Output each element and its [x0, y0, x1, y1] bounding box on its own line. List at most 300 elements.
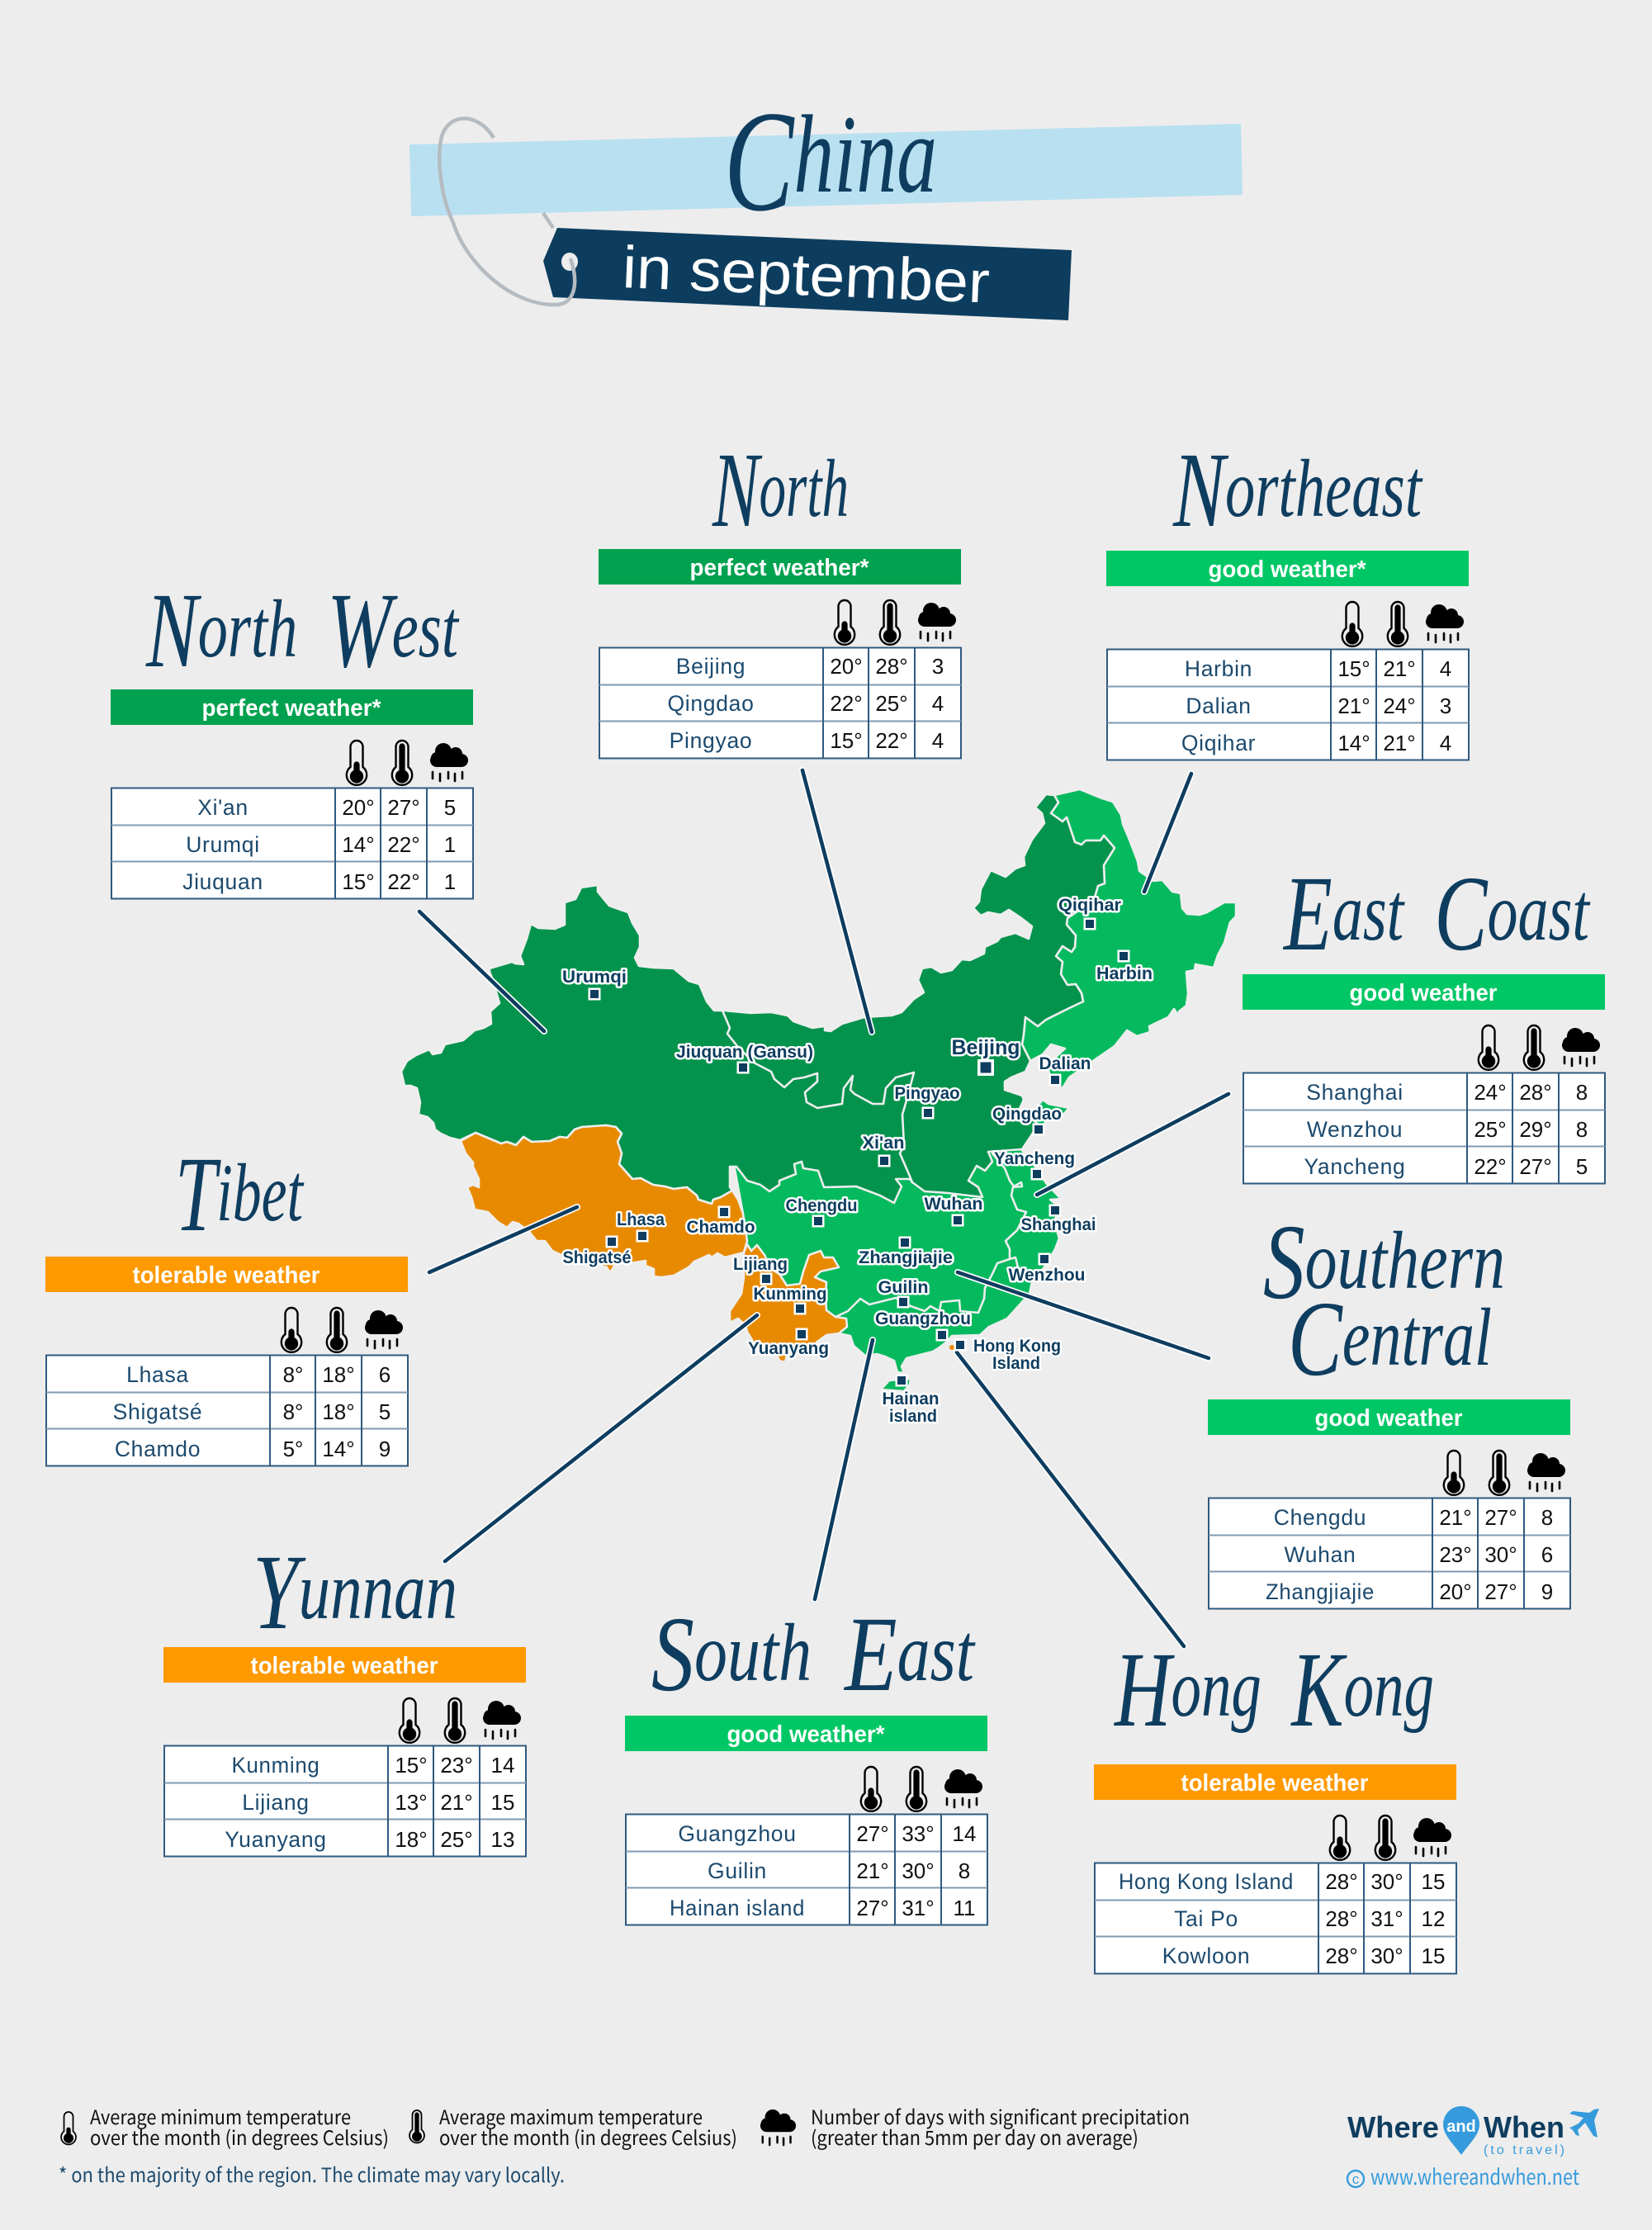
city: Beijing: [951, 1036, 1020, 1076]
city: Urumqi: [562, 968, 627, 1001]
panel body: East Coast: [1243, 974, 1605, 1184]
icon: rainy days: [1413, 1818, 1451, 1856]
climate table: Lijiang: [242, 1790, 310, 1815]
city: Shanghai: [1020, 1204, 1096, 1234]
climate table: [1095, 1863, 1456, 1973]
city: Shigatsé: [563, 1235, 631, 1267]
climate table: [46, 1356, 408, 1466]
climate table: 23°: [440, 1753, 473, 1778]
legend: [59, 2101, 1190, 2188]
climate table: 1: [444, 869, 456, 894]
climate table: 28°: [1325, 1869, 1358, 1894]
climate table: 28°: [1519, 1080, 1552, 1105]
heading: Hong Kong: K: [1290, 1631, 1347, 1749]
city: Yuanyang: [748, 1328, 829, 1358]
leader: Southern Central: [958, 1272, 1209, 1358]
climate table: 14: [953, 1821, 976, 1846]
climate table: 15°: [342, 869, 375, 894]
climate table: Chengdu: [1274, 1505, 1366, 1530]
heading: North West: orth: [198, 583, 327, 675]
climate table: Qiqihar: [1181, 731, 1256, 755]
climate table: Wuhan: [1285, 1542, 1356, 1567]
climate table: 28°: [1325, 1906, 1358, 1931]
city: Shigatsé: Shigatsé: [563, 1248, 631, 1267]
climate table: 14°: [322, 1437, 355, 1461]
climate table: Kunming: [231, 1753, 320, 1778]
legend text: rainy days: [811, 2101, 1190, 2151]
region: Southern Central, South East and East Coast: [732, 1149, 1061, 1373]
city: Chengdu: Chengdu: [786, 1196, 857, 1215]
icon: minimum temperature: [1330, 1816, 1350, 1860]
climate table: 4: [1440, 656, 1451, 681]
climate table: 21°: [856, 1858, 889, 1883]
city: Lijiang: [733, 1255, 788, 1285]
panel body: South East: [625, 1716, 987, 1925]
legend text: maximum temperature: [439, 2101, 737, 2151]
heading: Southern Central: [1263, 1203, 1505, 1399]
legend text: maximum temperature: over the month (in degrees Celsius): [439, 2122, 737, 2151]
city: Xi'an: Xi'an: [862, 1134, 905, 1153]
icon: maximum temperature: [880, 600, 900, 645]
weather banner: [1106, 551, 1469, 586]
icon: rainy days: [1562, 1028, 1600, 1066]
icon: minimum temperature: [347, 741, 367, 785]
city: Hong Kong Island: Hong Kong: [973, 1337, 1061, 1356]
region: Northeast: [1022, 789, 1236, 1088]
heading: Southern Central: entral: [1342, 1291, 1492, 1383]
climate table: Chamdo: [115, 1437, 201, 1461]
climate table: 6: [379, 1362, 391, 1387]
leader: Northeast: [1144, 774, 1191, 892]
climate table: 21°: [1337, 694, 1370, 718]
climate table: 9: [379, 1437, 391, 1461]
weather banner: perfect weather*: [201, 695, 381, 722]
region: Hong Kong: [949, 1345, 954, 1350]
climate table: 27°: [856, 1821, 889, 1846]
leader: Tibet: [429, 1207, 577, 1272]
weather banner: good weather: [1349, 980, 1498, 1006]
climate table: 30°: [1370, 1869, 1403, 1894]
climate table: 27°: [1519, 1154, 1552, 1179]
icon: maximum temperature: [327, 1308, 347, 1352]
icon: minimum temperature: [835, 600, 854, 645]
panel: Tibet: [45, 1135, 408, 1466]
climate table: 18°: [322, 1399, 355, 1424]
climate table: Hong Kong Island: [1119, 1869, 1294, 1894]
leader: Yunnan: [445, 1315, 757, 1561]
city: Hainan island: Hainan: [882, 1390, 940, 1409]
city: Yuanyang: Yuanyang: [748, 1339, 829, 1358]
panel body: Northeast: [1106, 551, 1469, 760]
panel: North: [599, 431, 961, 758]
climate table: Harbin: [1185, 656, 1252, 681]
climate table: [626, 1815, 987, 1925]
climate table: 15: [1422, 1869, 1445, 1894]
climate table: 20°: [342, 795, 375, 820]
climate table: 5: [1576, 1154, 1588, 1179]
heading: Hong Kong: ong: [1344, 1642, 1434, 1734]
city: Hong Kong Island: Island: [992, 1354, 1040, 1373]
panel: North West: [111, 571, 473, 898]
title band: [409, 124, 1243, 216]
climate table: Wenzhou: [1307, 1117, 1403, 1142]
weather banner: [599, 549, 961, 585]
climate table: 5: [444, 795, 456, 820]
climate table: 14°: [342, 832, 375, 857]
heading: East Coast: ast: [1332, 866, 1434, 958]
logo pin word: and: and: [1446, 2118, 1476, 2136]
city: Wuhan: Wuhan: [925, 1195, 982, 1214]
icon: maximum temperature: [445, 1698, 465, 1743]
city: Harbin: Harbin: [1096, 964, 1153, 983]
heading: South East: ast: [897, 1607, 976, 1698]
icon: rainy days: [918, 603, 956, 641]
climate table: 28°: [1325, 1944, 1358, 1968]
weather banner: good weather*: [1209, 556, 1366, 583]
city: Qiqihar: [1058, 896, 1121, 930]
climate table: 31°: [902, 1896, 935, 1920]
city: Kunming: [753, 1285, 827, 1314]
city: Urumqi: Urumqi: [562, 968, 627, 987]
city: Yancheng: Yancheng: [994, 1149, 1075, 1168]
climate table: 24°: [1383, 694, 1416, 718]
icon: maximum temperature: [1375, 1816, 1395, 1860]
legend text: rainy days: Number of days with significant precipitation: [811, 2101, 1190, 2130]
heading: Hong Kong: ong: [1171, 1642, 1291, 1734]
climate table: 28°: [875, 654, 908, 679]
heading: South East: outh: [694, 1607, 845, 1698]
tag string: [439, 118, 575, 305]
weather banner: tolerable weather: [132, 1262, 320, 1289]
climate table: 5: [379, 1399, 391, 1424]
legend text: minimum temperature: [90, 2101, 389, 2151]
heading: North West: est: [392, 583, 460, 675]
legend text: minimum temperature: over the month (in degrees Celsius): [90, 2122, 389, 2151]
climate table: Xi'an: [197, 795, 249, 820]
icon: minimum temperature: [1479, 1025, 1498, 1070]
heading: South East: S: [651, 1595, 694, 1714]
climate table: 30°: [1484, 1542, 1517, 1567]
panel body: Southern Central: [1208, 1399, 1570, 1608]
heading: East Coast: E: [1283, 855, 1332, 973]
city: Guilin: [878, 1278, 928, 1308]
leader: East Coast: [1037, 1094, 1228, 1195]
city: Kunming: Kunming: [753, 1285, 827, 1304]
climate table: Yancheng: [1304, 1154, 1405, 1179]
city: Wenzhou: Wenzhou: [1009, 1266, 1085, 1285]
climate table: Beijing: [676, 654, 746, 679]
city: Beijing: Beijing: [951, 1036, 1020, 1059]
climate table: 15: [1422, 1944, 1445, 1968]
climate table: 3: [932, 654, 944, 679]
leader lines: [419, 770, 1228, 1646]
climate table: 4: [1440, 731, 1451, 755]
climate table: 5°: [283, 1437, 303, 1461]
panel body: North: [599, 549, 961, 758]
panel: South East: [625, 1595, 987, 1925]
heading: Yunnan: unnan: [299, 1545, 457, 1636]
legend icon: maximum temperature: [409, 2110, 424, 2142]
climate table: [164, 1745, 526, 1856]
city: Chengdu: [786, 1196, 857, 1227]
city markers and labels: [562, 896, 1153, 1426]
panel body: Hong Kong: [1094, 1764, 1456, 1973]
climate table: 31°: [1370, 1906, 1403, 1931]
city: Qingdao: Qingdao: [992, 1105, 1062, 1124]
city: Lhasa: Lhasa: [617, 1210, 665, 1229]
climate table: [1243, 1073, 1605, 1184]
weather banner: [111, 689, 473, 725]
region: Hainan island: [881, 1379, 911, 1391]
city: Harbin: [1096, 949, 1153, 983]
heading: Tibet: T: [175, 1135, 221, 1254]
climate table: 15: [491, 1790, 514, 1815]
climate table: 8: [1576, 1117, 1588, 1142]
climate table: Kowloon: [1162, 1944, 1250, 1968]
climate table: 1: [444, 832, 456, 857]
climate table: 30°: [1370, 1944, 1403, 1968]
climate table: 22°: [387, 869, 420, 894]
legend icon: minimum temperature: [61, 2112, 76, 2144]
climate table: 25°: [875, 691, 908, 716]
climate table: Jiuquan: [182, 869, 263, 894]
logo tagline: (to travel): [1484, 2143, 1564, 2157]
province borders: [722, 1011, 1026, 1317]
city: Hainan island: [882, 1374, 940, 1426]
heading: North: orth: [759, 443, 849, 534]
panel: Hong Kong: [1094, 1631, 1456, 1973]
logo wordmark: Where: Where: [1347, 2110, 1439, 2144]
climate table: 8: [1576, 1080, 1588, 1105]
icon: minimum temperature: [1444, 1451, 1464, 1495]
climate table: [599, 647, 961, 758]
climate table: Tai Po: [1174, 1906, 1238, 1931]
weather banner: tolerable weather: [251, 1653, 438, 1679]
city: Dalian: [1039, 1054, 1091, 1087]
city: Jiuquan: [676, 1043, 813, 1073]
climate table: Zhangjiajie: [1266, 1579, 1375, 1604]
heading: Southern Central: outhern: [1305, 1214, 1505, 1306]
climate table: Dalian: [1186, 694, 1252, 718]
climate table: 30°: [902, 1858, 935, 1883]
heading: Northeast: N: [1172, 431, 1229, 550]
weather banner: good weather: [1314, 1405, 1463, 1432]
city: Xi'an: [862, 1134, 905, 1167]
weather banner: [45, 1257, 408, 1292]
icon: minimum temperature: [861, 1767, 881, 1811]
icon: maximum temperature: [1388, 602, 1408, 646]
climate table: 8: [959, 1858, 970, 1883]
climate table: 8: [1541, 1505, 1553, 1530]
icon: rainy days: [1527, 1453, 1565, 1491]
climate table: 29°: [1519, 1117, 1552, 1142]
heading: East Coast: oast: [1488, 866, 1591, 958]
climate table: 27°: [1484, 1579, 1517, 1604]
panel: Northeast: [1106, 431, 1469, 760]
climate table: 27°: [1484, 1505, 1517, 1530]
panel body: North West: [111, 689, 473, 898]
legend text: maximum temperature: Average maximum temperature: [439, 2101, 703, 2130]
climate table: Urumqi: [186, 832, 260, 857]
icon: rainy days: [1426, 604, 1464, 642]
city: Chamdo: [687, 1205, 755, 1237]
icon: rainy days: [483, 1701, 521, 1739]
climate table: 20°: [1439, 1579, 1472, 1604]
website: www.whereandwhen.net: [1370, 2161, 1579, 2191]
panel: Southern Central: [1208, 1203, 1570, 1608]
city: Lijiang: Lijiang: [733, 1255, 788, 1274]
city: Qiqihar: Qiqihar: [1058, 896, 1121, 915]
leader: North: [802, 770, 872, 1032]
heading: South East: E: [844, 1595, 897, 1714]
city: Guangzhou: [875, 1309, 971, 1341]
weather banner: [1094, 1764, 1456, 1800]
climate table: Pingyao: [670, 728, 752, 753]
city: Dalian: Dalian: [1039, 1054, 1091, 1073]
climate table: 14: [491, 1753, 514, 1778]
climate table: Yuanyang: [225, 1827, 327, 1852]
heading: Northeast: ortheast: [1225, 443, 1423, 534]
weather banner: [1208, 1399, 1570, 1435]
weather banner: [1243, 974, 1605, 1010]
panel body: Yunnan: [163, 1647, 526, 1856]
city: Pingyao: [895, 1084, 959, 1120]
climate table: 12: [1422, 1906, 1445, 1931]
logo: Where and When: [1347, 2106, 1599, 2191]
region: Qingdao peninsula: [1032, 1100, 1069, 1133]
icon: maximum temperature: [1524, 1025, 1544, 1070]
region: Tibet: [461, 1125, 747, 1277]
climate table: 8°: [283, 1362, 303, 1387]
heading: North West: W: [327, 571, 398, 690]
region: Yunnan: [730, 1244, 847, 1362]
climate table: [1107, 649, 1469, 760]
climate table: Guangzhou: [678, 1821, 797, 1846]
climate table: 22°: [875, 728, 908, 753]
climate table: 3: [1440, 694, 1451, 718]
weather banner: good weather*: [727, 1721, 885, 1748]
logo pin: [1443, 2106, 1479, 2155]
city: Hainan island: island: [889, 1407, 937, 1426]
climate table: 33°: [902, 1821, 935, 1846]
map of China: [401, 789, 1236, 1391]
climate table: 18°: [322, 1362, 355, 1387]
climate table: 15°: [1337, 656, 1370, 681]
climate table: 18°: [395, 1827, 428, 1852]
legend text: minimum temperature: Average minimum temperature: [90, 2101, 351, 2130]
climate table: Shanghai: [1306, 1080, 1403, 1105]
climate table: Shigatsé: [113, 1399, 202, 1424]
city: Jiuquan: Jiuquan (Gansu): [676, 1043, 813, 1062]
climate table: 23°: [1439, 1542, 1472, 1567]
climate table: 13: [491, 1827, 514, 1852]
city: Shanghai: Shanghai: [1020, 1215, 1096, 1234]
climate table: 21°: [1383, 656, 1416, 681]
icon: rainy days: [430, 743, 468, 781]
panel: East Coast: [1243, 855, 1605, 1184]
footnote: * on the majority of the region. The climate may vary locally.: [59, 2159, 565, 2188]
climate table: Hainan island: [670, 1896, 805, 1920]
panel body: Tibet: [45, 1257, 408, 1466]
city: Wuhan: [925, 1195, 982, 1227]
subtitle: in september: in september: [621, 234, 991, 316]
climate table: 15°: [830, 728, 863, 753]
city: Zhangjiajie: Zhangjiajie: [859, 1248, 953, 1267]
heading: Southern Central: C: [1288, 1280, 1343, 1399]
climate table: 11: [953, 1896, 976, 1920]
region: North and North West: [401, 794, 1115, 1204]
climate table: [111, 788, 473, 898]
icon: maximum temperature: [906, 1767, 926, 1811]
climate table: 21°: [1383, 731, 1416, 755]
heading: North: N: [712, 431, 763, 550]
leader: North West: [419, 911, 544, 1031]
climate table: Qingdao: [667, 691, 755, 716]
icon: plane: [1569, 2109, 1599, 2138]
climate table: 6: [1541, 1542, 1553, 1567]
title: China: C: [724, 81, 795, 241]
climate table: 25°: [440, 1827, 473, 1852]
climate table: 15°: [395, 1753, 428, 1778]
climate table: 13°: [395, 1790, 428, 1815]
city: Guilin: Guilin: [878, 1278, 928, 1297]
city: Chamdo: Chamdo: [687, 1218, 755, 1237]
icon: minimum temperature: [282, 1308, 301, 1352]
city: Guangzhou: Guangzhou: [875, 1309, 971, 1328]
heading: Yunnan: Y: [253, 1533, 306, 1652]
leader: Hong Kong: [957, 1352, 1184, 1646]
climate table: 8°: [283, 1399, 303, 1424]
title block: [409, 81, 1243, 320]
climate table: 24°: [1474, 1080, 1507, 1105]
climate table: 20°: [830, 654, 863, 679]
legend icon: rainy days: [760, 2109, 796, 2145]
weather banner: tolerable weather: [1181, 1770, 1369, 1797]
legend text: rainy days: (greater than 5mm per day on average): [811, 2122, 1138, 2151]
heading: East Coast: C: [1434, 855, 1488, 973]
heading: North West: N: [145, 571, 201, 690]
climate table: Lhasa: [126, 1362, 189, 1387]
weather banner: perfect weather*: [690, 555, 869, 581]
climate table: 25°: [1474, 1117, 1507, 1142]
city: Wenzhou: [1009, 1253, 1085, 1285]
climate table: 27°: [856, 1896, 889, 1920]
climate table: 21°: [440, 1790, 473, 1815]
icon: minimum temperature: [1342, 602, 1362, 646]
heading: Southern Central: S: [1263, 1203, 1305, 1322]
icon: rainy days: [944, 1769, 982, 1807]
city: Qingdao: [992, 1105, 1062, 1136]
city: Pingyao: Pingyao: [895, 1084, 959, 1103]
climate table: 22°: [387, 832, 420, 857]
subtitle tag: [543, 228, 1072, 320]
panel: Yunnan: [163, 1533, 526, 1856]
climate table: 22°: [1474, 1154, 1507, 1179]
weather banner: [163, 1647, 526, 1683]
city: Hong Kong Island: [954, 1337, 1061, 1373]
climate table: 22°: [830, 691, 863, 716]
climate table: 9: [1541, 1579, 1553, 1604]
weather banner: [625, 1716, 987, 1751]
city: Lhasa: [617, 1210, 665, 1242]
leader: South East: [815, 1340, 873, 1599]
climate table: 4: [932, 691, 944, 716]
climate table: 14°: [1337, 731, 1370, 755]
climate table: 21°: [1439, 1505, 1472, 1530]
climate table: [1209, 1498, 1570, 1608]
climate table: 27°: [387, 795, 420, 820]
icon: maximum temperature: [392, 741, 412, 785]
